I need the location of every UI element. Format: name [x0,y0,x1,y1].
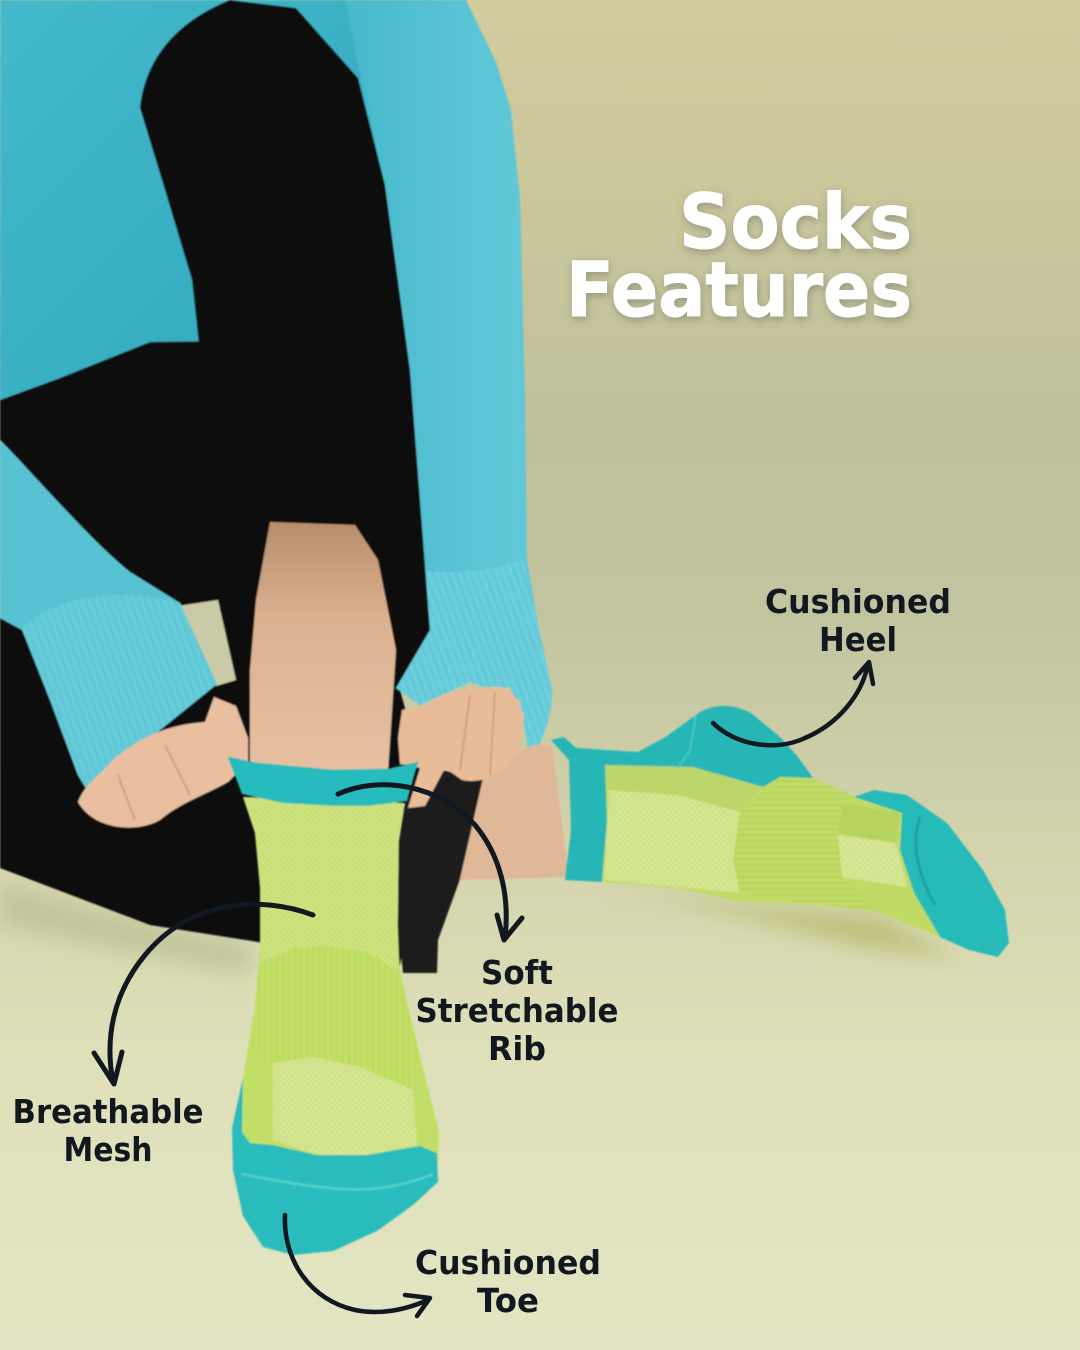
arrow: toe [285,1215,430,1316]
toe teal [854,790,1009,957]
right cuff [396,560,552,762]
label: soft stretchable rib: Soft [481,953,553,992]
arrow: heel [713,662,873,745]
title: Features [566,245,912,334]
title [566,177,912,334]
label: cushioned heel: Heel [819,620,897,659]
label: cushioned toe [415,1243,601,1320]
lime body [602,765,940,937]
label: cushioned heel: Cushioned [765,582,951,621]
hoodie torso [0,0,400,400]
right sleeve [345,0,552,762]
cuff [228,757,418,806]
lime body [242,797,439,1165]
heel seam [678,715,696,768]
label: breathable mesh: Mesh [64,1130,152,1169]
label: cushioned toe: Cushioned [415,1243,601,1282]
lower leg skin [250,522,396,772]
left sleeve [0,440,217,812]
lower mesh [273,1057,417,1155]
forefoot patch [838,803,900,843]
toe seam [916,817,935,905]
toe teal [232,1078,438,1255]
upper mesh [243,797,405,971]
far ankle skin [460,745,569,880]
upper darker band [605,765,763,812]
floor shadows [0,885,960,975]
figure: seated person [0,0,569,973]
gap behind the arm [178,600,236,686]
label: soft stretchable rib [416,953,618,1068]
cuff and heel teal [551,706,813,882]
label: soft stretchable rib: Rib [488,1029,546,1068]
ribbed midfoot [733,777,880,912]
ribbed section [252,946,417,1090]
arrow: mesh [94,904,313,1084]
label: soft stretchable rib: Stretchable [416,991,618,1030]
black knee leg [140,0,430,688]
mesh panel [604,790,740,893]
front sock [228,757,439,1255]
right hand [398,687,524,808]
toe seam [242,1174,433,1190]
forefoot mesh [838,835,907,887]
title: Socks [679,177,912,266]
left hand [78,697,248,827]
arrow: rib [338,785,522,940]
far leg fabric [398,770,483,973]
label: breathable mesh [12,1092,204,1169]
side sock [551,706,1009,957]
left cuff [22,595,217,812]
label: cushioned toe: Toe [477,1281,539,1320]
label: cushioned heel [765,582,951,659]
label: breathable mesh: Breathable [12,1092,204,1131]
trousers base [0,340,430,965]
